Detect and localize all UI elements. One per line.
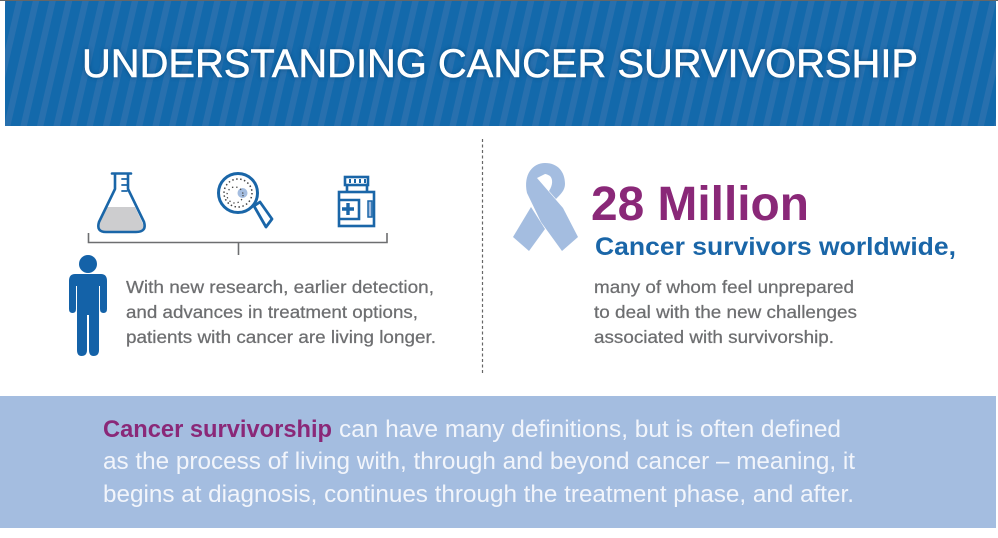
icon: person xyxy=(69,255,107,356)
icon: magnifying glass xyxy=(218,174,272,227)
text block: challenges: to deal with the new challenges xyxy=(594,302,857,322)
text block: challenges: associated with survivorship. xyxy=(594,327,834,347)
big number: 28 Million xyxy=(591,178,809,231)
text block: longer lives: patients with cancer are living longer. xyxy=(126,327,436,347)
text block: challenges xyxy=(594,277,857,347)
panel: 28 million survivors xyxy=(513,163,956,347)
title: UNDERSTANDING CANCER SURVIVORSHIP xyxy=(82,42,918,86)
divider xyxy=(482,139,484,373)
definition text: Cancer survivorship xyxy=(103,416,332,443)
definition text: begins at diagnosis, continues through the treatment phase, and after. xyxy=(103,481,854,508)
title banner xyxy=(5,1,996,126)
subheading: Cancer survivors worldwide, xyxy=(595,233,956,261)
text block: longer lives xyxy=(126,277,436,347)
icon: medicine bottle xyxy=(339,177,374,226)
definition text: as the process of living with, through and beyond cancer – meaning, it xyxy=(103,448,855,475)
definition text: can have many definitions, but is often defined xyxy=(339,416,841,443)
text block: longer lives: and advances in treatment options, xyxy=(126,302,418,322)
text block: challenges: many of whom feel unprepared xyxy=(594,277,854,297)
definition text xyxy=(103,416,855,508)
panel: definition xyxy=(0,396,996,528)
text block: longer lives: With new research, earlier detection, xyxy=(126,277,434,297)
icon: awareness ribbon xyxy=(513,163,578,251)
bracket xyxy=(88,233,387,255)
title banner: UNDERSTANDING CANCER SURVIVORSHIP xyxy=(82,42,918,86)
panel: research and treatment xyxy=(69,174,436,356)
icon: flask xyxy=(98,174,145,232)
